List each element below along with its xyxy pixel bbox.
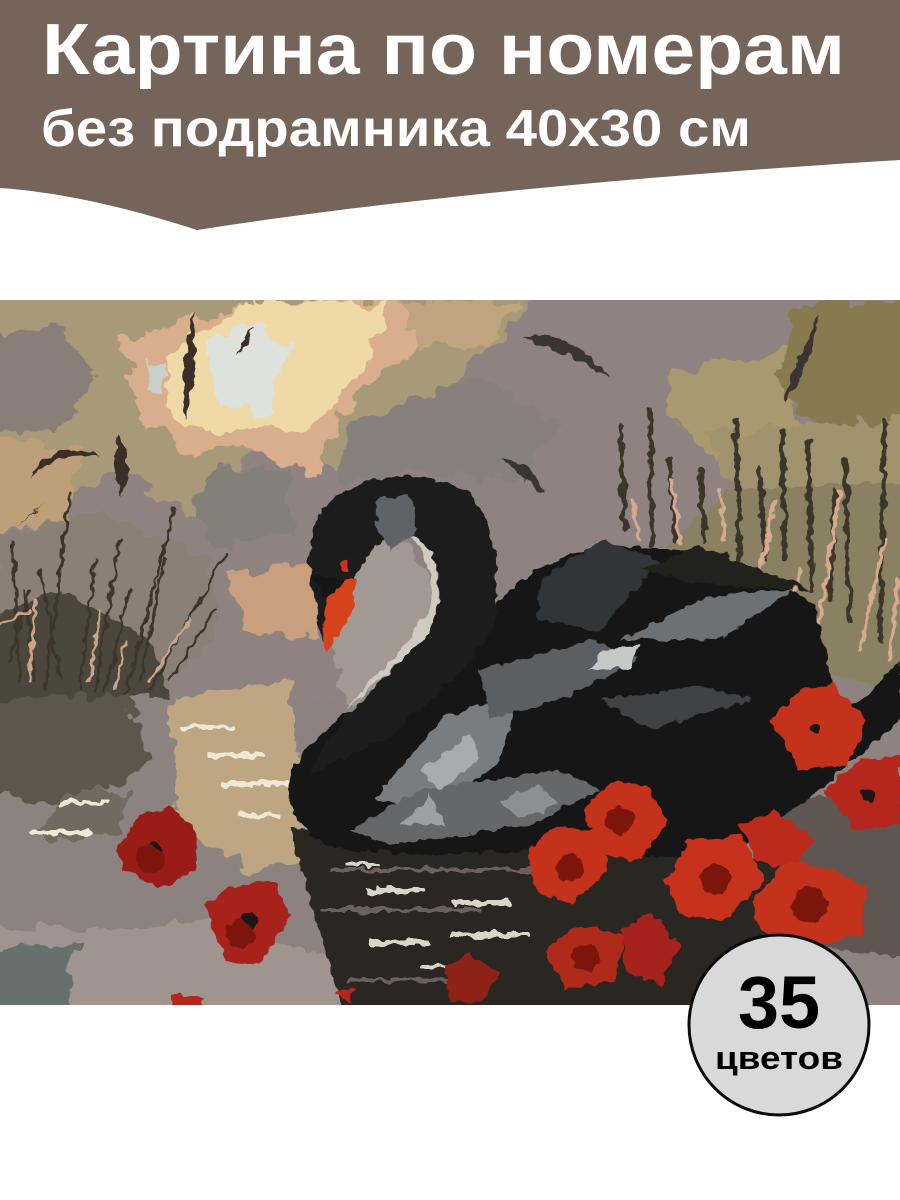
swan body	[288, 547, 900, 860]
swan	[288, 476, 900, 860]
swan white neck highlight	[345, 534, 440, 710]
swan head highlight	[375, 495, 418, 550]
title: Картина по номерам	[42, 10, 845, 90]
painted sky	[0, 270, 900, 720]
right reeds and distant feathers	[502, 315, 900, 700]
swan beak	[322, 578, 356, 652]
water highlights	[30, 726, 290, 835]
subtitle: без подрамника 40х30 см	[41, 100, 751, 158]
left reeds	[0, 312, 254, 715]
badge: 35 colours	[689, 935, 869, 1115]
painting: black swan with red poppies	[0, 270, 900, 1030]
red poppies	[116, 684, 900, 1010]
badge number: 35	[738, 961, 820, 1044]
header banner	[0, 0, 900, 230]
dark water under swan	[290, 794, 900, 1005]
badge label: цветов	[715, 1040, 843, 1076]
swan neck and head	[306, 474, 498, 711]
swan wing highlights	[350, 540, 810, 845]
water, light left side	[0, 680, 350, 1030]
